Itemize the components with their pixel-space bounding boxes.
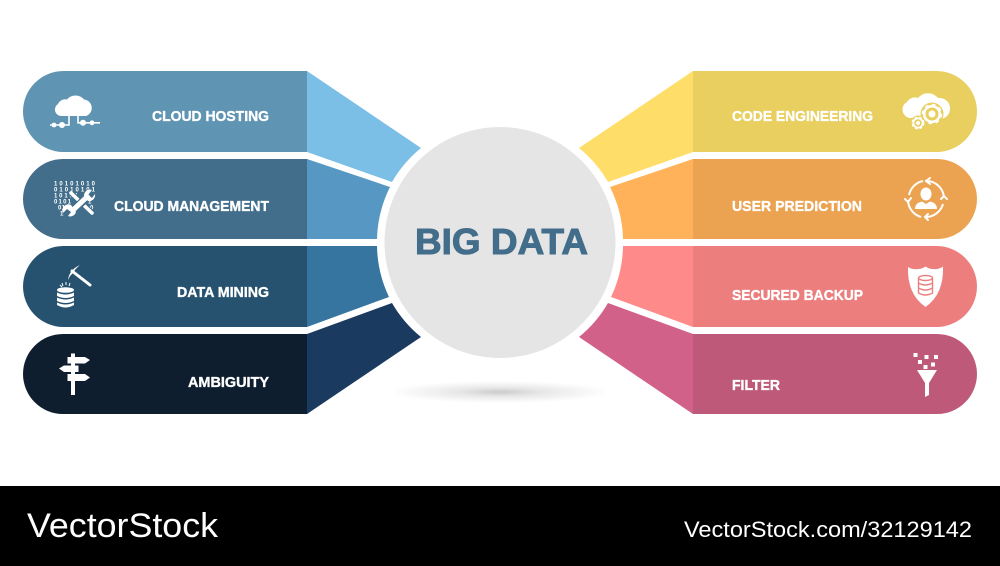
icon: funnel with data squares — [914, 353, 938, 397]
heading: code engineering: CODE ENGINEERING — [732, 109, 873, 125]
icon: binary digits and tools: 0 1 0 1 0 1 0 1 — [54, 188, 96, 194]
icon: binary digits and tools: 0 1 0 1 — [54, 200, 72, 206]
icon: user with cycle arrows — [905, 178, 947, 220]
central circle — [384, 127, 616, 358]
icon: pickaxe and database — [57, 265, 90, 308]
heading: cloud hosting: CLOUD HOSTING — [152, 109, 269, 125]
shadow under circle — [390, 381, 610, 403]
icon: binary digits and tools: 0 1 — [58, 206, 66, 212]
icon: binary digits and tools: 0 — [90, 206, 94, 212]
heading: user prediction: USER PREDICTION — [732, 199, 862, 215]
footer image id: VectorStock.com/32129142 — [684, 517, 972, 542]
icon: binary digits and tools — [54, 182, 96, 218]
panel: cloud management — [23, 159, 390, 239]
panel: code engineering — [579, 71, 977, 182]
title: BIG DATA — [415, 221, 588, 262]
icon: database shield — [908, 266, 943, 307]
icon: binary digits and tools: 1 0 1 0 1 — [54, 194, 79, 200]
heading: data mining: DATA MINING — [177, 285, 269, 301]
heading: secured backup: SECURED BACKUP — [732, 288, 863, 304]
icon: binary digits and tools: 1 0 1 0 1 0 1 0 — [54, 182, 96, 188]
panel: user prediction — [610, 159, 977, 239]
heading: cloud management: CLOUD MANAGEMENT — [114, 199, 269, 215]
footer bar — [0, 486, 1000, 566]
panel: cloud hosting — [23, 71, 421, 182]
icon: binary digits and tools: 1 — [60, 212, 64, 218]
panel: ambiguity — [23, 303, 421, 414]
icon: cloud gears — [902, 93, 950, 130]
icon: binary digits and tools: 1 — [88, 200, 92, 206]
heading: ambiguity: AMBIGUITY — [188, 375, 269, 391]
panel: data mining — [23, 246, 389, 327]
footer brand: VectorStock — [27, 507, 219, 545]
heading: filter: FILTER — [732, 378, 781, 394]
icon: signpost — [59, 354, 90, 395]
icon: cloud network — [50, 95, 100, 128]
panel: secured backup — [611, 246, 977, 327]
panel: filter — [579, 303, 977, 414]
